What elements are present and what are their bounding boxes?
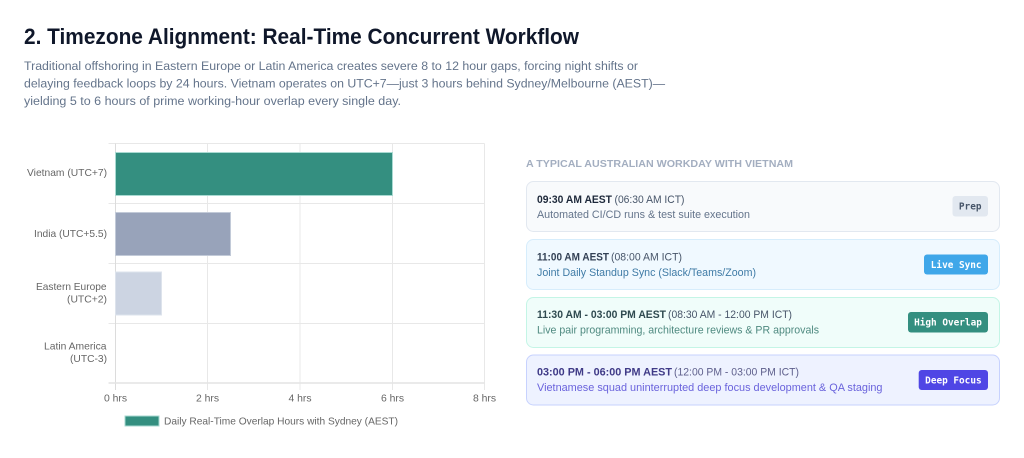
value axis labels: [104, 394, 496, 404]
panel: live sync card: 11:00 AM AEST: [537, 252, 609, 264]
badge: Deep Focus: [919, 370, 988, 390]
category axis labels: (UTC+2): [67, 294, 107, 306]
value axis labels: 6 hrs: [381, 394, 404, 404]
panel: high overlap card: Live pair programming, architecture reviews & PR approvals: [537, 324, 819, 336]
badge: Deep Focus: Deep Focus: [925, 375, 982, 386]
category axis labels: India (UTC+5.5): [34, 229, 107, 240]
panel: prep card: (06:30 AM ICT): [614, 194, 684, 206]
panel: high overlap card: 11:30 AM - 03:00 PM AEST: [537, 309, 667, 321]
panel: deep focus card: Vietnamese squad uninterrupted deep focus development & QA staging: [537, 382, 883, 394]
panel: prep card: 09:30 AM AEST: [537, 194, 613, 206]
badge: Prep: [952, 196, 988, 216]
panel: deep focus card: (12:00 PM - 03:00 PM ICT): [674, 366, 799, 378]
value axis labels: 8 hrs: [473, 394, 496, 404]
panel: high overlap card: [526, 298, 1000, 348]
legend: Daily Real-Time Overlap Hours with Sydney (AEST): [164, 416, 398, 428]
title: 2. Timezone Alignment: Real-Time Concurrent Workflow: [24, 24, 580, 49]
badge: High Overlap: High Overlap: [914, 318, 982, 328]
badge: Live Sync: [924, 254, 988, 274]
value axis labels: 4 hrs: [288, 394, 312, 404]
bar: Vietnam: [116, 152, 392, 196]
panel: prep card: Automated CI/CD runs & test suite execution: [537, 209, 750, 221]
category axis labels: Eastern Europe: [36, 282, 107, 293]
category axis labels: (UTC-3): [70, 354, 107, 365]
bar chart: daily overlap hours: [27, 144, 496, 428]
badge: Live Sync: Live Sync: [931, 260, 982, 271]
schedule heading: A TYPICAL AUSTRALIAN WORKDAY WITH VIETNAM: [526, 159, 793, 170]
panel: live sync card: Joint Daily Standup Sync (Slack/Teams/Zoom): [537, 267, 756, 279]
bar: Eastern Europe: [116, 272, 162, 315]
panel: prep card: [526, 182, 1000, 232]
intro text block: Traditional offshoring in Eastern Europe or Latin America creates severe 8 to 12 hour gaps, forcing night shifts or: [24, 59, 638, 73]
panel: deep focus card: [526, 355, 1000, 405]
badge: High Overlap: [908, 312, 988, 332]
panel: deep focus card: 03:00 PM - 06:00 PM AEST: [537, 366, 673, 378]
panel: live sync card: [526, 240, 1000, 290]
value axis labels: 2 hrs: [196, 394, 219, 404]
badge: Prep: Prep: [959, 202, 982, 212]
value axis labels: 0 hrs: [104, 394, 127, 404]
intro text block: [24, 59, 666, 108]
intro text block: delaying feedback loops by 24 hours. Vietnam operates on UTC+7—just 3 hours behind Sydney/Melbourne (AEST)—: [24, 76, 666, 90]
category axis labels: Vietnam (UTC+7): [27, 168, 107, 179]
category axis labels: Latin America: [44, 342, 107, 352]
panel: live sync card: (08:00 AM ICT): [611, 252, 682, 264]
panel: high overlap card: (08:30 AM - 12:00 PM ICT): [668, 309, 792, 321]
intro text block: yielding 5 to 6 hours of prime working-hour overlap every single day.: [24, 94, 401, 108]
bar: India: [116, 212, 230, 256]
category axis labels: [27, 168, 107, 365]
